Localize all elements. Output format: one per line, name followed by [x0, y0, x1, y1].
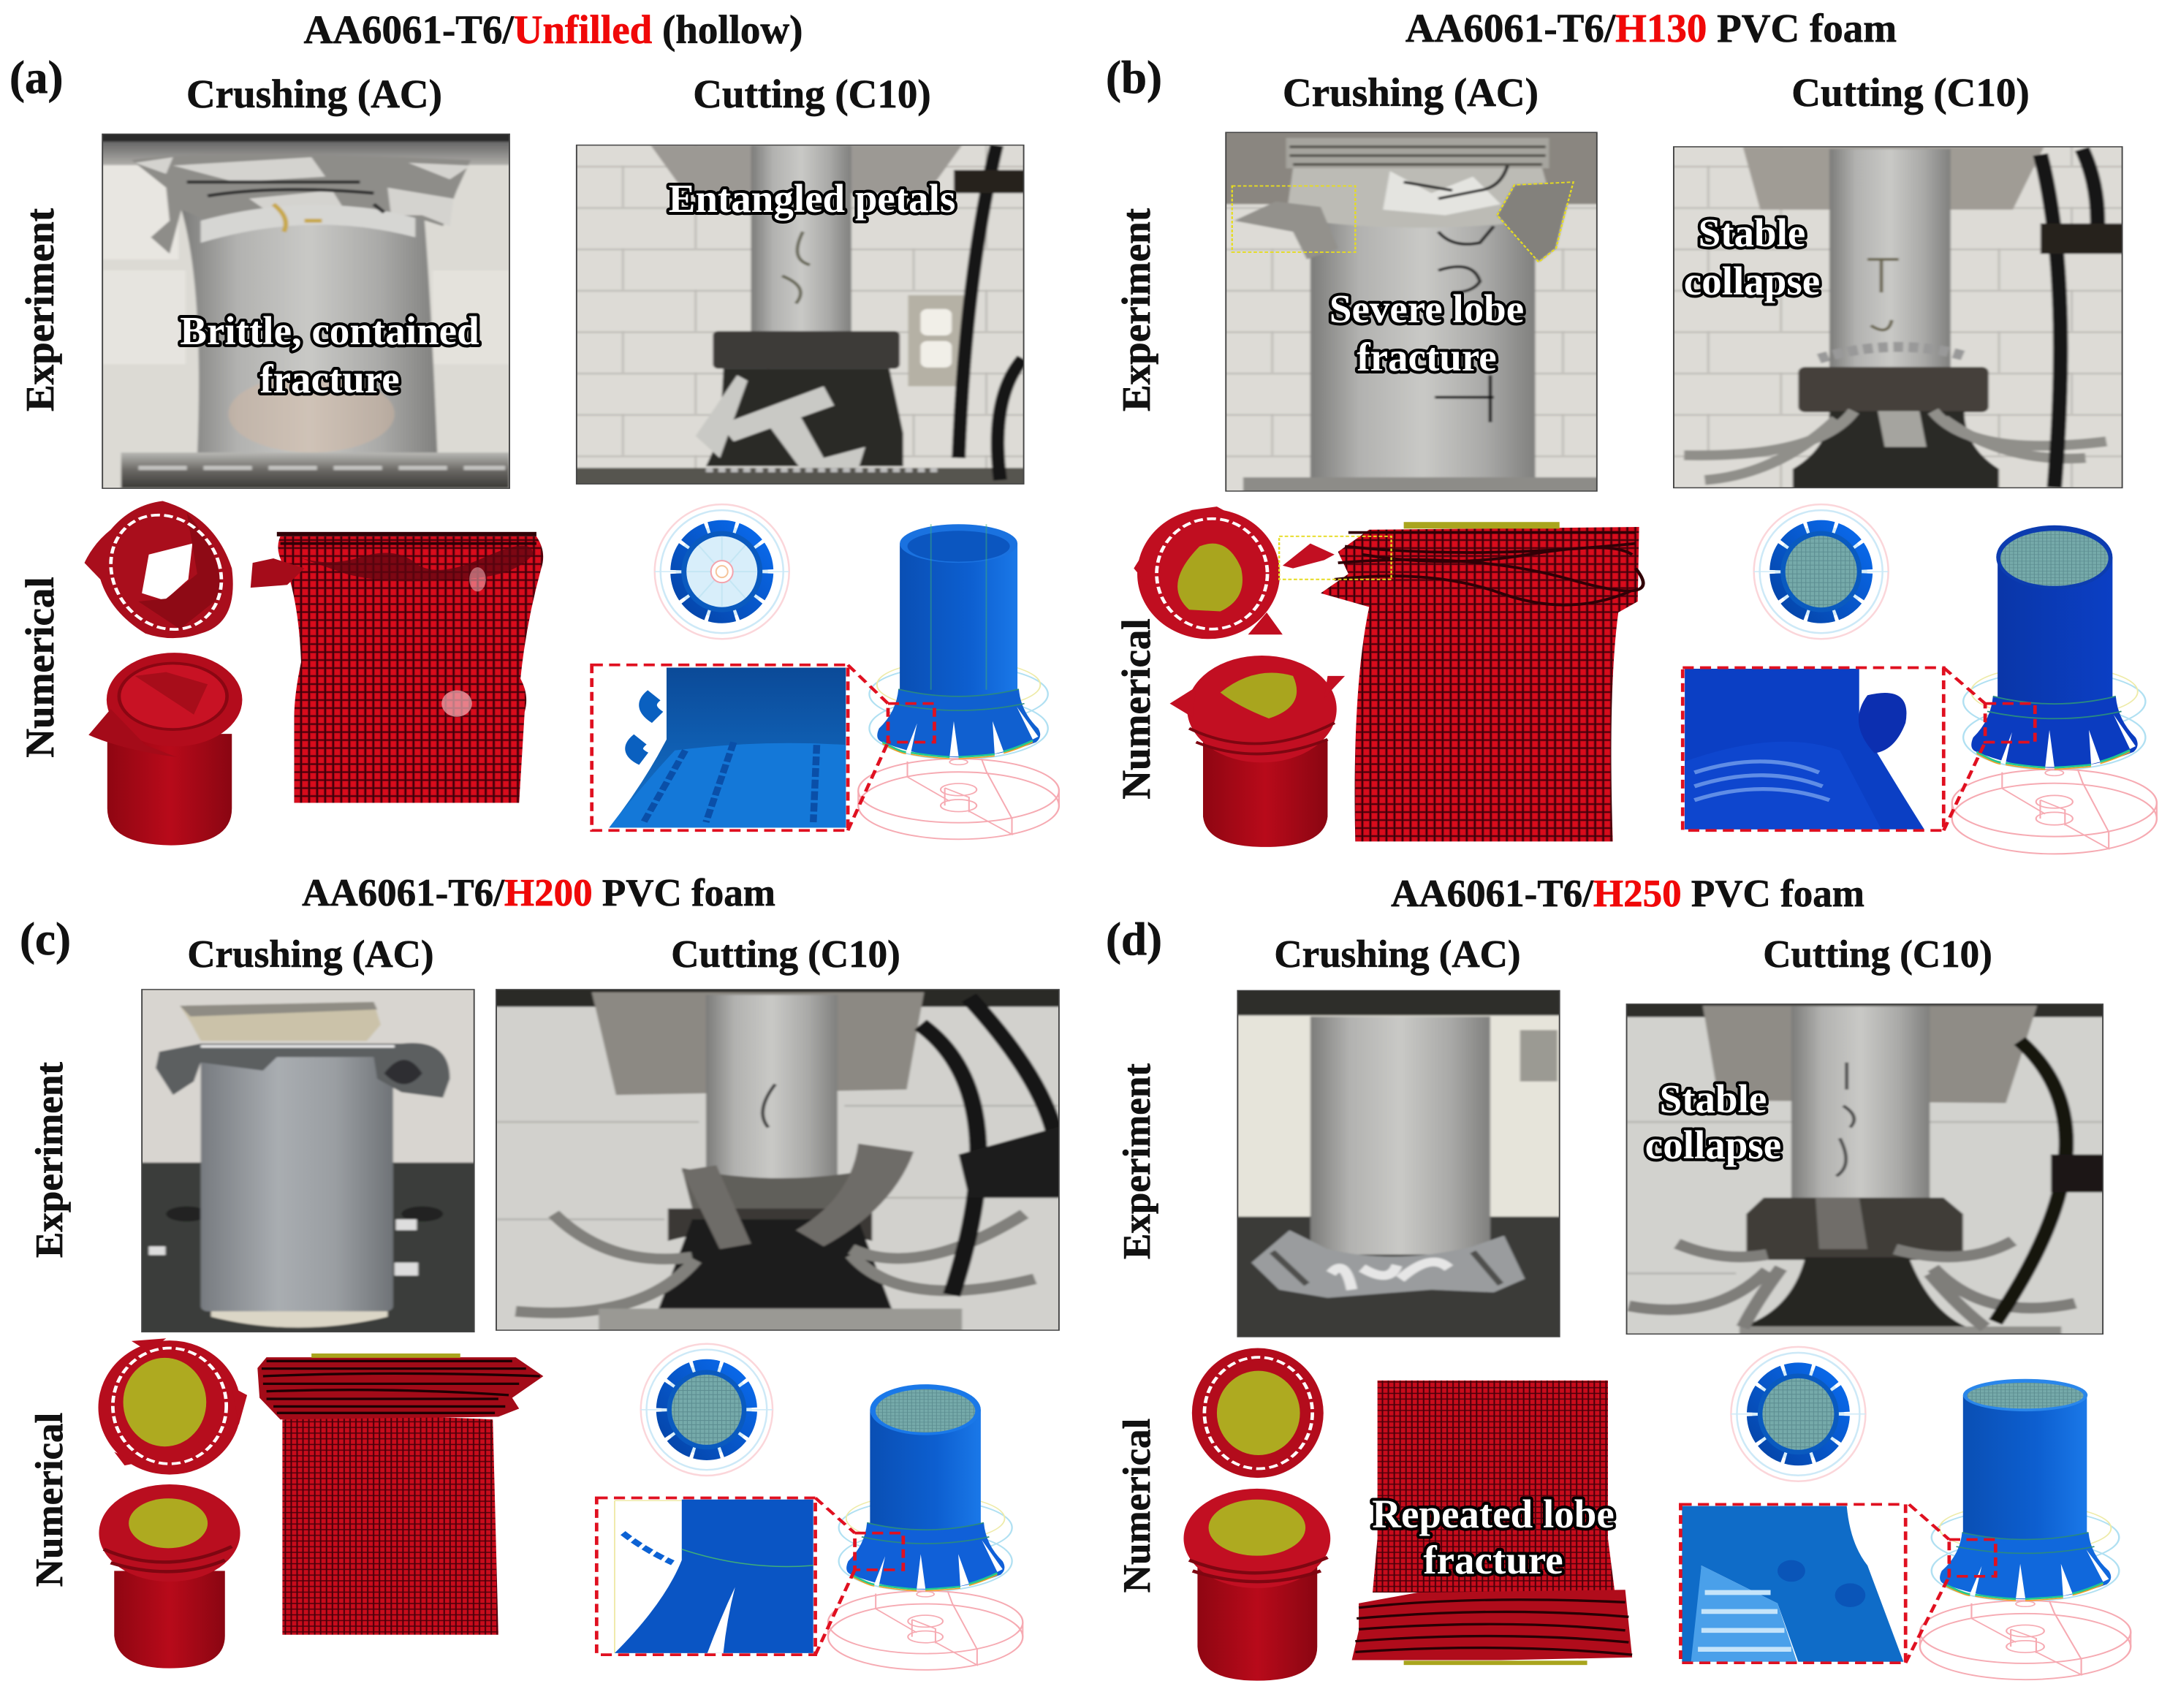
annotation brittle fracture: Brittle, contained — [180, 308, 479, 353]
row label experiment b: Experiment — [1114, 208, 1158, 411]
zoom inset b — [1682, 668, 2035, 830]
annotation repeated lobe fracture: fracture — [1423, 1538, 1563, 1582]
photo border c1 — [142, 990, 474, 1332]
annotation severe lobe fracture: Severe lobe — [1329, 286, 1524, 331]
title c: AA6061-T6/H200 PVC foam — [302, 872, 775, 914]
subhead cutting a: Cutting (C10) — [693, 72, 931, 116]
numerical mesh body d — [1352, 1381, 1632, 1665]
photo: cutting experiment b — [1674, 148, 2122, 487]
numerical cutter assembly c — [828, 1384, 1023, 1670]
panel (c): H200 PVC foam — [20, 872, 1073, 1670]
panel letter a: (a) — [10, 52, 63, 103]
subhead cutting d: Cutting (C10) — [1763, 933, 1992, 976]
numerical mesh body c — [257, 1354, 543, 1635]
annotation stable collapse d: Stable — [1660, 1077, 1767, 1121]
numerical cutter assembly b — [1952, 525, 2157, 854]
panel c drawings — [98, 982, 1073, 1670]
title b: AA6061-T6/H130 PVC foam — [1405, 6, 1897, 50]
numerical cutter assembly a — [858, 524, 1059, 839]
numerical crushed isometric view a — [88, 653, 242, 846]
row label numerical a: Numerical — [18, 577, 62, 758]
numerical cutter assembly d — [1920, 1379, 2131, 1679]
annotation severe lobe fracture: fracture — [1357, 335, 1497, 379]
numerical top view c — [98, 1338, 247, 1475]
numerical mesh body b — [1279, 522, 1643, 841]
photo border b2 — [1674, 147, 2122, 487]
row label experiment d: Experiment — [1116, 1063, 1158, 1259]
row label experiment c: Experiment — [29, 1062, 71, 1258]
panel b drawings — [1134, 127, 2157, 854]
photo: cutting experiment a — [577, 145, 1023, 484]
photo: cutting experiment d — [1627, 1004, 2102, 1334]
photo: cutting experiment c — [497, 990, 1058, 1330]
title d: AA6061-T6/H250 PVC foam — [1391, 873, 1864, 915]
title a: AA6061-T6/Unfilled (hollow) — [304, 7, 803, 52]
annotation repeated lobe fracture: Repeated lobe — [1372, 1492, 1615, 1536]
numerical top view a — [85, 501, 236, 639]
photo border a2 — [577, 145, 1024, 484]
annotation entangled petals: Entangled petals — [669, 176, 955, 221]
subhead crushing a: Crushing (AC) — [186, 72, 442, 116]
row label experiment a: Experiment — [18, 208, 62, 411]
numerical top view d — [1192, 1348, 1324, 1478]
zoom inset d — [1680, 1504, 1995, 1663]
numerical cutter top view c — [641, 1344, 773, 1476]
panel letter b: (b) — [1106, 52, 1162, 103]
photo: crushing experiment c — [143, 990, 474, 1332]
zoom inset c — [596, 1498, 903, 1655]
row label numerical c: Numerical — [29, 1413, 71, 1587]
panel d drawings — [1183, 984, 2131, 1681]
numerical mesh body a — [251, 532, 543, 803]
subhead crushing d: Crushing (AC) — [1274, 933, 1521, 976]
subhead cutting b: Cutting (C10) — [1791, 70, 2030, 115]
numerical cutter top view b — [1754, 504, 1889, 639]
panel letter d: (d) — [1106, 914, 1162, 965]
subhead crushing c: Crushing (AC) — [187, 933, 434, 976]
panel letter c: (c) — [20, 914, 71, 965]
photo: crushing experiment d — [1238, 991, 1559, 1336]
subhead crushing b: Crushing (AC) — [1283, 70, 1539, 115]
photo border d1 — [1237, 990, 1560, 1337]
panel a drawings — [85, 127, 1059, 846]
photo border b1 — [1226, 132, 1597, 491]
panel (b): H130 PVC foam — [1106, 6, 2157, 854]
numerical cutter top view a — [655, 504, 789, 639]
annotation stable collapse b: collapse — [1684, 259, 1820, 303]
subhead cutting c: Cutting (C10) — [671, 933, 900, 976]
numerical cutter top view d — [1731, 1347, 1865, 1481]
numerical top view b — [1134, 506, 1283, 639]
annotation stable collapse d: collapse — [1645, 1123, 1781, 1167]
panel (a): unfilled hollow tube — [10, 7, 1059, 846]
row label numerical b: Numerical — [1114, 618, 1158, 800]
photo border a1 — [102, 134, 509, 488]
numerical crushed isometric view c — [99, 1484, 240, 1669]
photo: crushing experiment b — [1226, 133, 1596, 491]
photo: crushing experiment a — [103, 134, 509, 488]
row label numerical d: Numerical — [1116, 1419, 1158, 1593]
annotation stable collapse b: Stable — [1699, 210, 1805, 255]
numerical crushed isometric view b — [1170, 656, 1345, 847]
panel (d): H250 PVC foam — [1106, 873, 2131, 1681]
annotation brittle fracture: fracture — [259, 357, 400, 401]
numerical crushed isometric view d — [1183, 1489, 1330, 1681]
photo border c2 — [496, 990, 1059, 1330]
photo border d2 — [1627, 1004, 2103, 1334]
zoom inset a — [592, 665, 934, 830]
